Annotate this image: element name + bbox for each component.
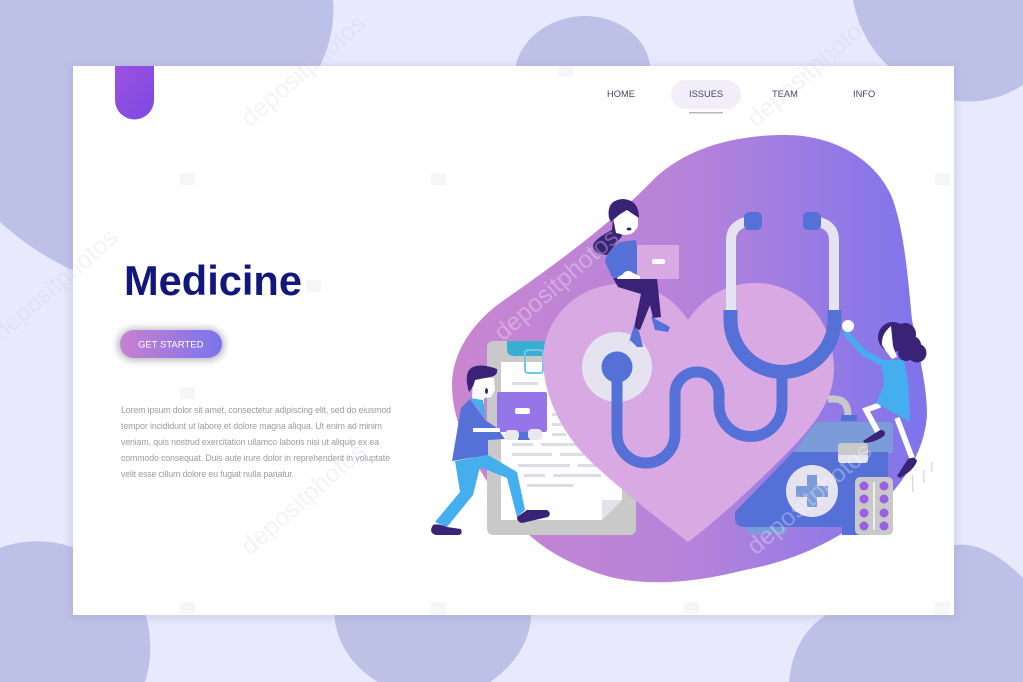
hair [878, 322, 926, 362]
laptop base [617, 271, 640, 279]
ear tubes [731, 222, 834, 312]
figure: woman climbing [842, 320, 932, 492]
body text: commodo consequat. Duis aute irure dolor in reprehenderit in voluptate [121, 453, 390, 463]
panel shadow [71, 66, 956, 618]
bookmark tab [115, 66, 154, 120]
first aid kit [735, 399, 893, 535]
watermark text [489, 223, 877, 561]
heart [543, 283, 834, 542]
cross badge [786, 465, 838, 517]
watermark text on panel [0, 9, 877, 561]
active underline [689, 112, 723, 114]
figure: woman with laptop [593, 199, 679, 347]
clipboard clip [507, 341, 546, 356]
paper lines [512, 382, 601, 487]
long hair [593, 218, 622, 255]
legs [866, 405, 912, 458]
body text: tempor incididunt ut labore et dolore magna aliqua. Ut enim ad minim [121, 421, 382, 431]
clip outline [525, 350, 543, 373]
active pill [671, 80, 741, 109]
figure: man carrying box [431, 366, 550, 535]
nav: issues: ISSUES [689, 89, 723, 99]
button: get started [118, 329, 224, 360]
title: Medicine [124, 257, 302, 304]
motion lines [912, 462, 932, 492]
hand [842, 320, 854, 332]
kit handle [828, 399, 848, 415]
jacket [452, 399, 505, 461]
box [497, 392, 547, 432]
watermark text: depositphotos [489, 223, 624, 347]
hair [467, 366, 497, 392]
body text [121, 405, 391, 479]
nav: team: TEAM [772, 89, 798, 99]
watermark text: depositphotos [742, 437, 877, 561]
face [882, 326, 897, 359]
chest piece backing [582, 332, 652, 402]
mouth [485, 388, 488, 394]
face [613, 210, 638, 235]
laptop [637, 245, 679, 279]
paper fold [602, 500, 622, 520]
arm [473, 428, 500, 432]
stethoscope [582, 212, 834, 463]
nav: info: INFO [853, 89, 875, 99]
button: get started: GET STARTED [138, 340, 204, 350]
chest piece [602, 352, 632, 382]
tube [617, 367, 782, 463]
arm [845, 332, 884, 364]
kit body [735, 452, 888, 527]
hands [505, 430, 519, 440]
trousers [435, 455, 525, 527]
nav: home: HOME [607, 89, 635, 99]
shoes [863, 430, 885, 443]
watermark text on panel: depositphotos [236, 9, 371, 133]
paper [501, 362, 622, 520]
body text: veniam, quis nostrud exercitation ullamco laboris nisi ut aliquip ex ea [121, 437, 379, 447]
main gradient blob [452, 135, 927, 582]
yoke [730, 310, 834, 372]
body text: velit esse cillum dolore eu fugiat nulla pariatur. [121, 469, 294, 479]
pill blister [855, 477, 893, 535]
trousers [613, 278, 661, 330]
white panel [73, 66, 954, 615]
kit feet [747, 525, 787, 534]
watermark text on panel: depositphotos [742, 9, 877, 133]
camera watermark marks [180, 66, 950, 614]
navigation [607, 80, 875, 114]
ear tips [744, 212, 762, 230]
shirt [470, 398, 486, 420]
body text: Lorem ipsum dolor sit amet, consectetur adipiscing elit, sed do eiusmod [121, 405, 391, 415]
shoes [628, 326, 643, 347]
latch [838, 443, 868, 463]
face [472, 378, 495, 404]
shoes [431, 524, 462, 535]
dress [876, 360, 910, 422]
sweater [605, 240, 640, 278]
clipboard [487, 341, 636, 535]
mouth [626, 228, 632, 230]
kit lid [793, 422, 893, 453]
watermark text on panel: depositphotos [236, 437, 371, 561]
hair top [609, 199, 639, 222]
